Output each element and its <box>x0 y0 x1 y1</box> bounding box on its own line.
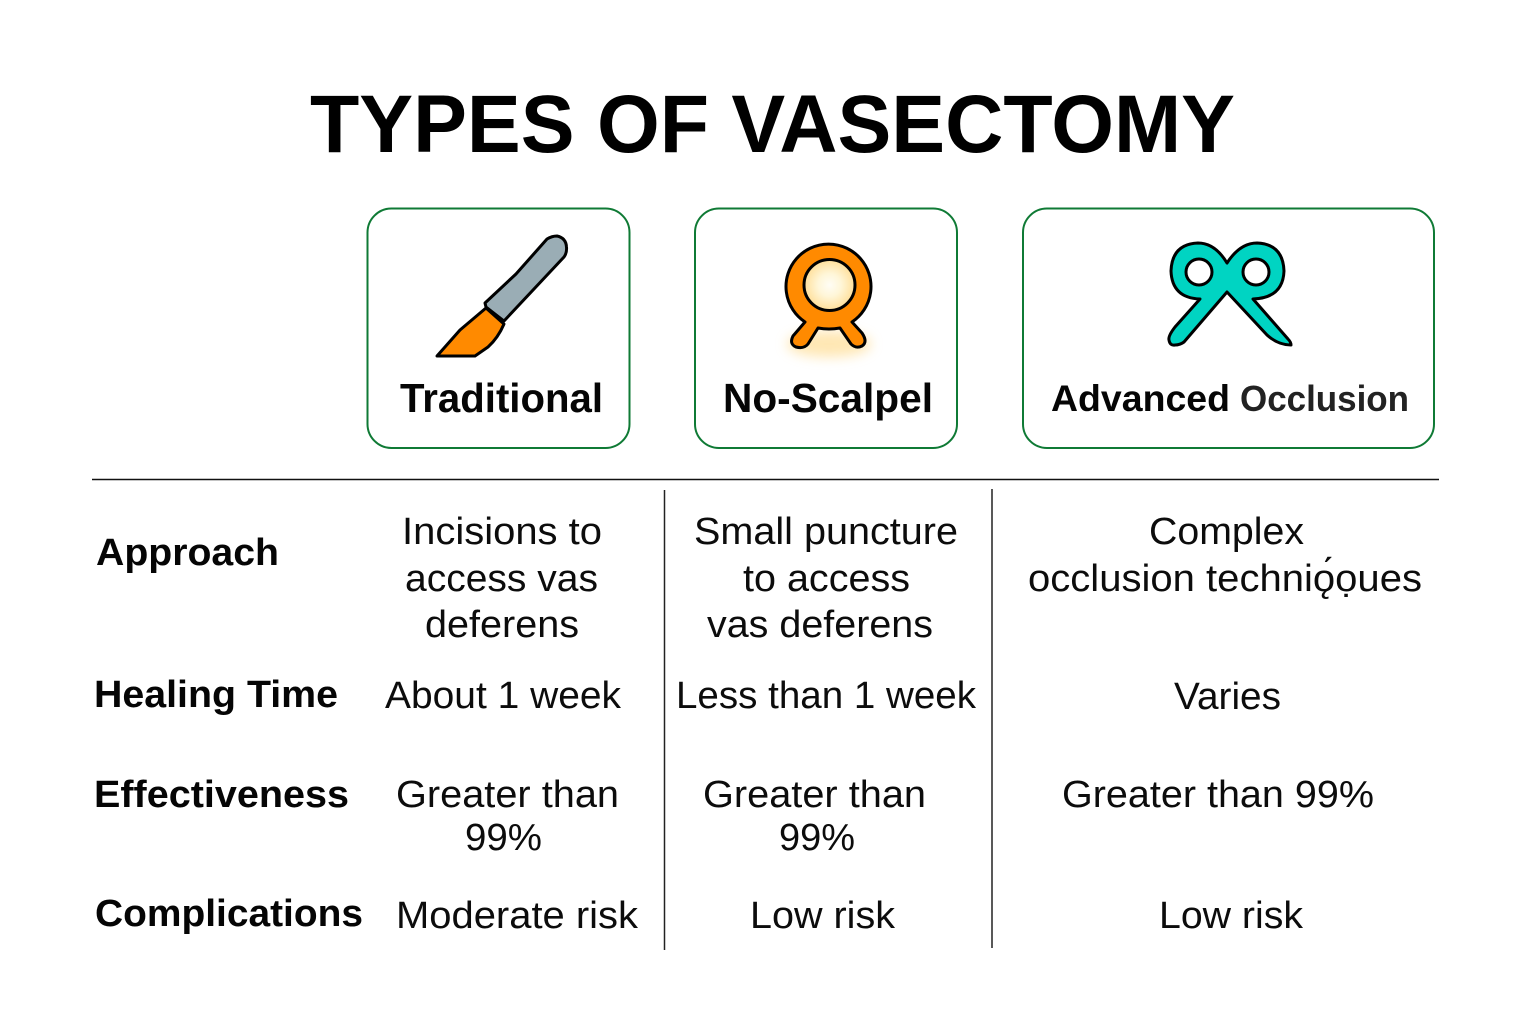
icon: ring clamp <box>786 244 871 357</box>
row: effectiveness: Greater than 99% <box>1062 774 1374 816</box>
icon: scalpel <box>437 236 567 356</box>
label: advanced occlusion: Occlusion <box>1240 378 1409 419</box>
row: effectiveness <box>94 774 1374 859</box>
label: advanced occlusion: Advanced <box>1051 378 1230 419</box>
row: approach: Small puncture <box>694 511 958 553</box>
panel: traditional <box>368 208 630 448</box>
row: approach: deferens <box>425 604 579 646</box>
row: approach: Approach <box>96 532 279 574</box>
row: healing time: Varies <box>1174 676 1281 718</box>
row: complications: Low risk <box>750 895 896 937</box>
row: approach: access vas <box>405 558 598 600</box>
row: effectiveness: 99% <box>465 817 542 859</box>
title: TYPES OF VASECTOMY <box>310 79 1235 170</box>
row: approach: Complex <box>1149 511 1304 553</box>
label: no-scalpel: No-Scalpel <box>723 375 933 421</box>
label: advanced occlusion <box>1051 378 1409 419</box>
row: healing time: Healing Time <box>94 674 338 716</box>
panel: no-scalpel <box>695 208 957 448</box>
row: effectiveness: Greater than <box>703 774 926 816</box>
row: approach <box>96 511 1422 646</box>
icon: scissors <box>1169 243 1291 345</box>
row: effectiveness: 99% <box>779 817 855 859</box>
row: healing time: About 1 week <box>385 675 622 717</box>
row: effectiveness: Effectiveness <box>94 774 349 816</box>
row: healing time <box>94 674 1281 718</box>
row: complications: Moderate risk <box>396 895 639 937</box>
row: healing time: Less than 1 week <box>676 675 977 717</box>
row: approach: Incisions to <box>402 511 602 553</box>
row: approach: occlusion techniǫ́ọues <box>1028 556 1422 600</box>
panel: advanced occlusion <box>1023 208 1434 448</box>
row: approach: to access <box>743 558 910 600</box>
row: approach: vas deferens <box>707 604 933 646</box>
row: complications: Low risk <box>1159 895 1304 937</box>
row: complications: Complications <box>95 893 363 935</box>
row: complications <box>95 893 1304 937</box>
label: traditional: Traditional <box>400 375 603 421</box>
row: effectiveness: Greater than <box>396 774 619 816</box>
